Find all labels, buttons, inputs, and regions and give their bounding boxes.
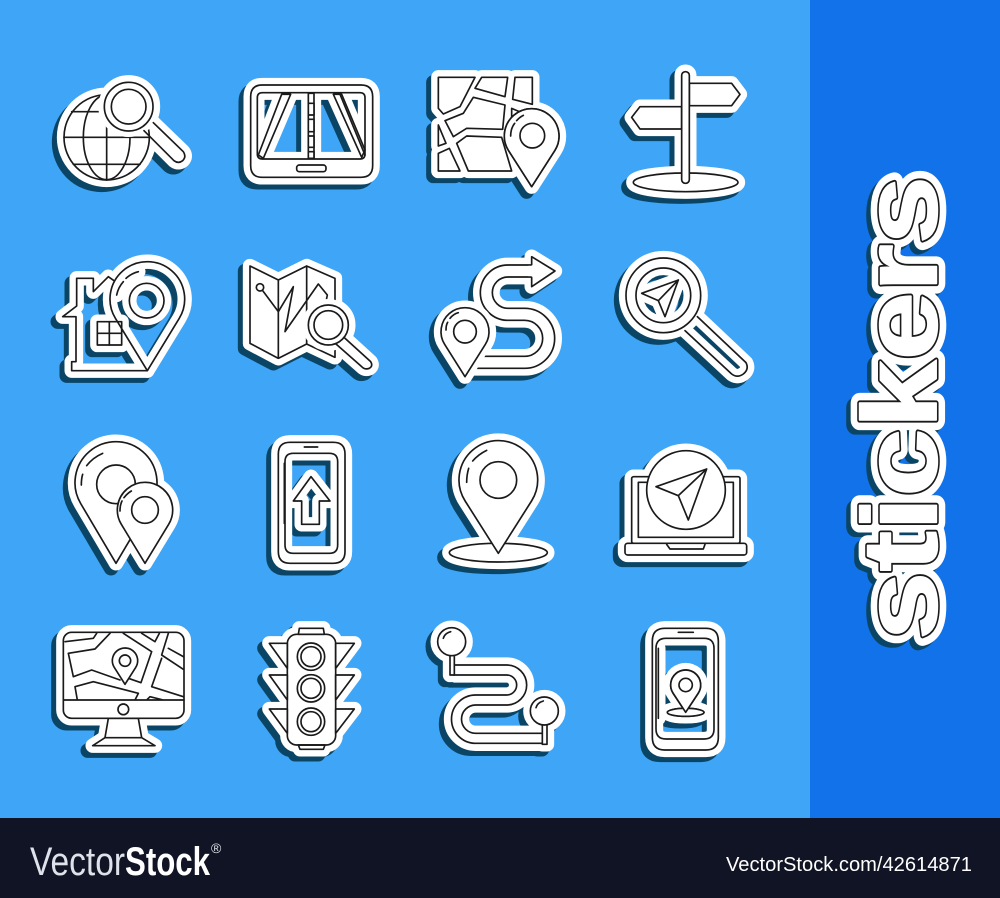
footer logo: VectorStock <box>30 840 222 884</box>
icon: phone with up arrow <box>273 442 345 568</box>
icon: winding route with two points <box>433 628 558 749</box>
background panel <box>0 0 810 818</box>
icon: magnifier with navigation arrow <box>621 258 747 381</box>
vertical title: stickers: stickers <box>842 176 960 640</box>
footer image id: VectorStock.com/42614871 <box>726 854 972 876</box>
icon: location pin on base <box>444 441 547 567</box>
icon: two location pins <box>70 442 173 568</box>
footer bar <box>0 818 1000 898</box>
footer logo: VectorStock: ® <box>211 840 222 856</box>
vertical title: stickers: stickers <box>842 176 960 640</box>
icon: signpost <box>627 72 740 197</box>
side panel <box>810 0 1000 818</box>
icon: globe with magnifier <box>59 82 185 185</box>
icon: house with location pin <box>58 262 185 376</box>
icon: folded map with magnifier <box>245 266 372 374</box>
icon: phone with location pin <box>647 628 718 755</box>
icon: navigator tablet with road <box>246 85 373 182</box>
icon: laptop with navigation arrow <box>620 451 747 560</box>
footer logo: VectorStock: Stock <box>125 840 211 884</box>
vertical title: stickers: stickers <box>842 176 960 640</box>
footer logo: VectorStock: Vector <box>30 840 125 884</box>
icon: traffic light <box>264 628 354 754</box>
icon: desktop monitor with map <box>58 632 184 751</box>
icon: route with arrow and pin <box>436 257 555 382</box>
vertical title: stickers: stickers <box>837 180 955 644</box>
icon: city map with pin <box>433 77 559 192</box>
